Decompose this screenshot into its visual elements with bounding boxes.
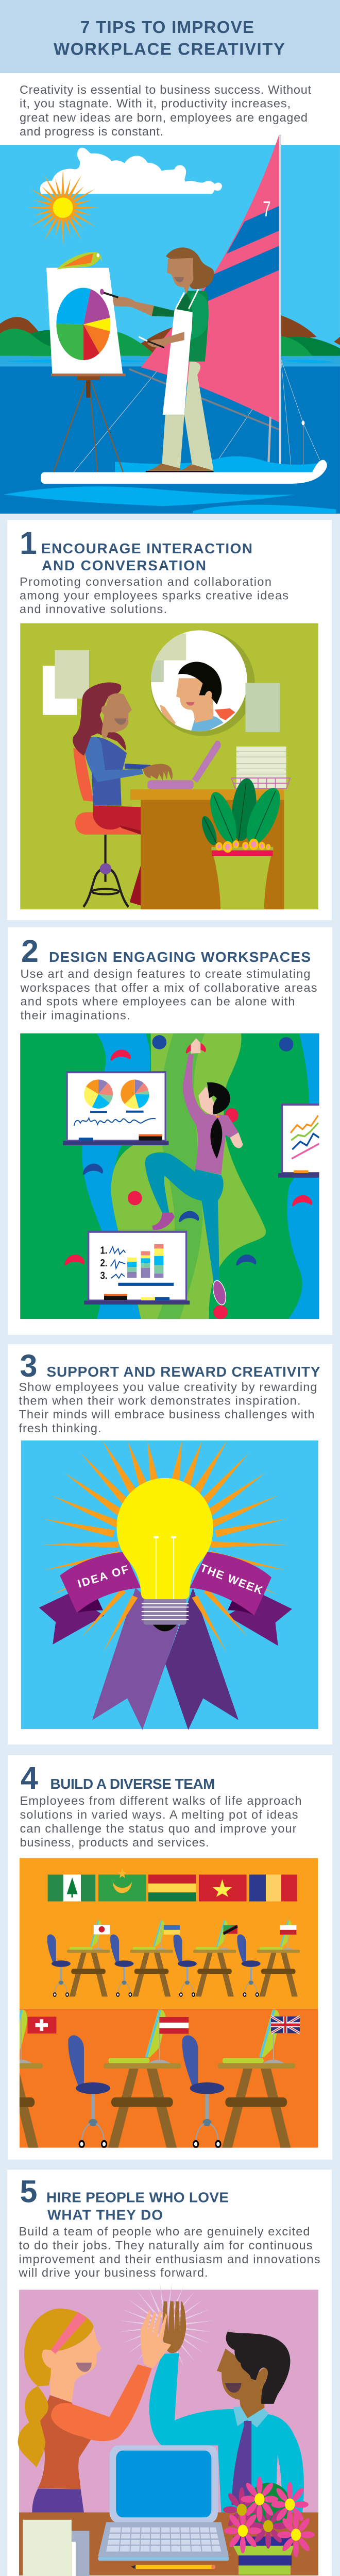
whiteboard with bars and numbered list: 3. — [100, 1269, 107, 1281]
body text: Promoting conversation and collaboration — [20, 575, 271, 588]
heading: HIRE PEOPLE WHO LOVE — [46, 2190, 229, 2205]
illustration: climbing wall with whiteboards — [20, 1033, 324, 1319]
banner text left: IDEA OF — [76, 1563, 130, 1590]
heading: ENCOURAGE INTERACTION — [41, 540, 252, 556]
body text: them when their work demonstrates inspiration. — [19, 1394, 301, 1408]
panel: tip 4 — [0, 1755, 332, 2160]
body text — [20, 1794, 302, 1849]
illustration: high five at the office — [18, 2282, 318, 2576]
body text: workspaces that offer a mix of collaborative areas — [20, 981, 317, 994]
banner text right: THE WEEK — [198, 1561, 265, 1597]
body text: Build a team of people who are genuinely excited — [19, 2225, 310, 2238]
banner — [60, 1552, 271, 1616]
desk surface — [19, 2513, 318, 2575]
body text: to do their jobs. They naturally aim for continuous — [19, 2239, 312, 2252]
sun — [25, 170, 100, 245]
medal ribbons — [92, 1588, 239, 1730]
flower pot — [223, 2477, 315, 2574]
video chat bubble with man — [149, 630, 255, 736]
rigging lines — [74, 360, 320, 472]
whiteboard with line chart — [278, 1105, 324, 1178]
back row desks — [47, 1920, 110, 1996]
whiteboard with bars and numbered list: 2. — [100, 1257, 107, 1269]
hills — [0, 315, 340, 363]
intro text block: great new ideas are born, employees are engaged — [20, 111, 308, 124]
light bulb — [116, 1478, 213, 1631]
bird — [57, 252, 102, 269]
hero illustration: painter on sailboat — [0, 134, 340, 514]
body text — [19, 1380, 317, 1435]
body text: Use art and design features to create stimulating — [21, 967, 310, 980]
body text: Employees from different walks of life approach — [20, 1794, 302, 1807]
number 3: 3 — [20, 1348, 37, 1383]
heading: DESIGN ENGAGING WORKSPACES — [49, 949, 311, 965]
man — [149, 2301, 304, 2513]
paper stack in basket — [231, 747, 290, 789]
number 4: 4 — [21, 1760, 38, 1795]
panel: tip 3 — [8, 1344, 332, 1744]
heading — [41, 540, 252, 573]
heading: SUPPORT AND REWARD CREATIVITY — [46, 1364, 320, 1380]
seated woman with stool — [73, 682, 173, 907]
title: 7 TIPS TO IMPROVE — [80, 18, 254, 37]
body text: Their minds will embrace business challenges with — [19, 1408, 314, 1421]
sail — [141, 134, 279, 422]
title: WORKPLACE CREATIVITY — [54, 39, 285, 59]
boat hull — [41, 460, 327, 484]
desk flags front row — [27, 2016, 300, 2034]
pencil — [131, 2565, 215, 2569]
mast and boom — [129, 369, 279, 430]
bulb rays — [41, 1438, 288, 1597]
body text: can challenge the status quo and improve your — [20, 1822, 297, 1835]
sail number: 7 — [263, 197, 271, 221]
number 2: 2 — [21, 934, 39, 969]
intro text block — [0, 73, 340, 145]
body text: and spots where employees can be alone with — [21, 994, 295, 1008]
easel and canvas — [46, 268, 126, 472]
heading: AND CONVERSATION — [42, 557, 206, 573]
number 1: 1 — [20, 526, 37, 561]
desk — [130, 789, 284, 909]
intro text block: and progress is constant. — [20, 125, 163, 138]
body text — [20, 967, 317, 1022]
woman — [18, 2309, 172, 2513]
body text — [19, 2225, 320, 2279]
notepad — [23, 2520, 89, 2576]
wall flags — [48, 1868, 297, 1902]
body text: their imaginations. — [21, 1009, 130, 1022]
body text: fresh thinking. — [19, 1421, 101, 1435]
body text: solutions in varied ways. A melting pot of ideas — [20, 1808, 298, 1821]
climber — [145, 1038, 243, 1307]
desk flags back row — [94, 1925, 296, 1935]
illustration: light bulb award — [21, 1438, 318, 1730]
body text: business, products and services. — [20, 1836, 209, 1849]
lower rays — [79, 1589, 250, 1653]
climbing holds — [64, 1035, 312, 1319]
heading — [46, 2190, 229, 2223]
body text: Show employees you value creativity by rewarding — [19, 1380, 317, 1394]
pie chart on canvas — [56, 288, 110, 360]
panel: tip 1 — [7, 520, 332, 920]
ribbon tails — [39, 1593, 292, 1646]
high five burst rays — [118, 2282, 213, 2368]
whiteboard with bars and numbered list — [84, 1232, 190, 1304]
painter figure — [100, 247, 214, 471]
body text — [20, 575, 288, 616]
whiteboard with bars and numbered list: 1. — [100, 1244, 107, 1256]
body text: will drive your business forward. — [19, 2266, 208, 2279]
title — [54, 18, 285, 59]
whiteboard with pie charts — [63, 1072, 168, 1145]
number 5: 5 — [20, 2174, 37, 2209]
body text: and innovative solutions. — [20, 602, 167, 616]
body text: improvement and their enthusiasm and innovations — [19, 2252, 320, 2266]
panel: tip 2 — [8, 927, 332, 1335]
potted plant — [202, 778, 280, 856]
header band with title — [0, 0, 340, 73]
heading: WHAT THEY DO — [47, 2207, 163, 2223]
intro text block: Creativity is essential to business success. Without — [20, 83, 311, 96]
body text: among your employees sparks creative ideas — [20, 588, 288, 602]
waves under hull — [3, 486, 336, 513]
water waves — [115, 456, 317, 472]
panel: tip 5 — [7, 2170, 332, 2576]
laptop — [147, 740, 221, 789]
intro text block: it, you stagnate. With it, productivity increases, — [20, 97, 291, 110]
cloud — [40, 148, 222, 194]
illustration: woman at laptop on video chat — [20, 623, 318, 909]
laptop — [98, 2445, 229, 2561]
heading: BUILD A DIVERSE TEAM — [50, 1776, 215, 1792]
illustration: desks and international flags — [0, 1858, 318, 2148]
front row desks — [20, 2009, 43, 2148]
